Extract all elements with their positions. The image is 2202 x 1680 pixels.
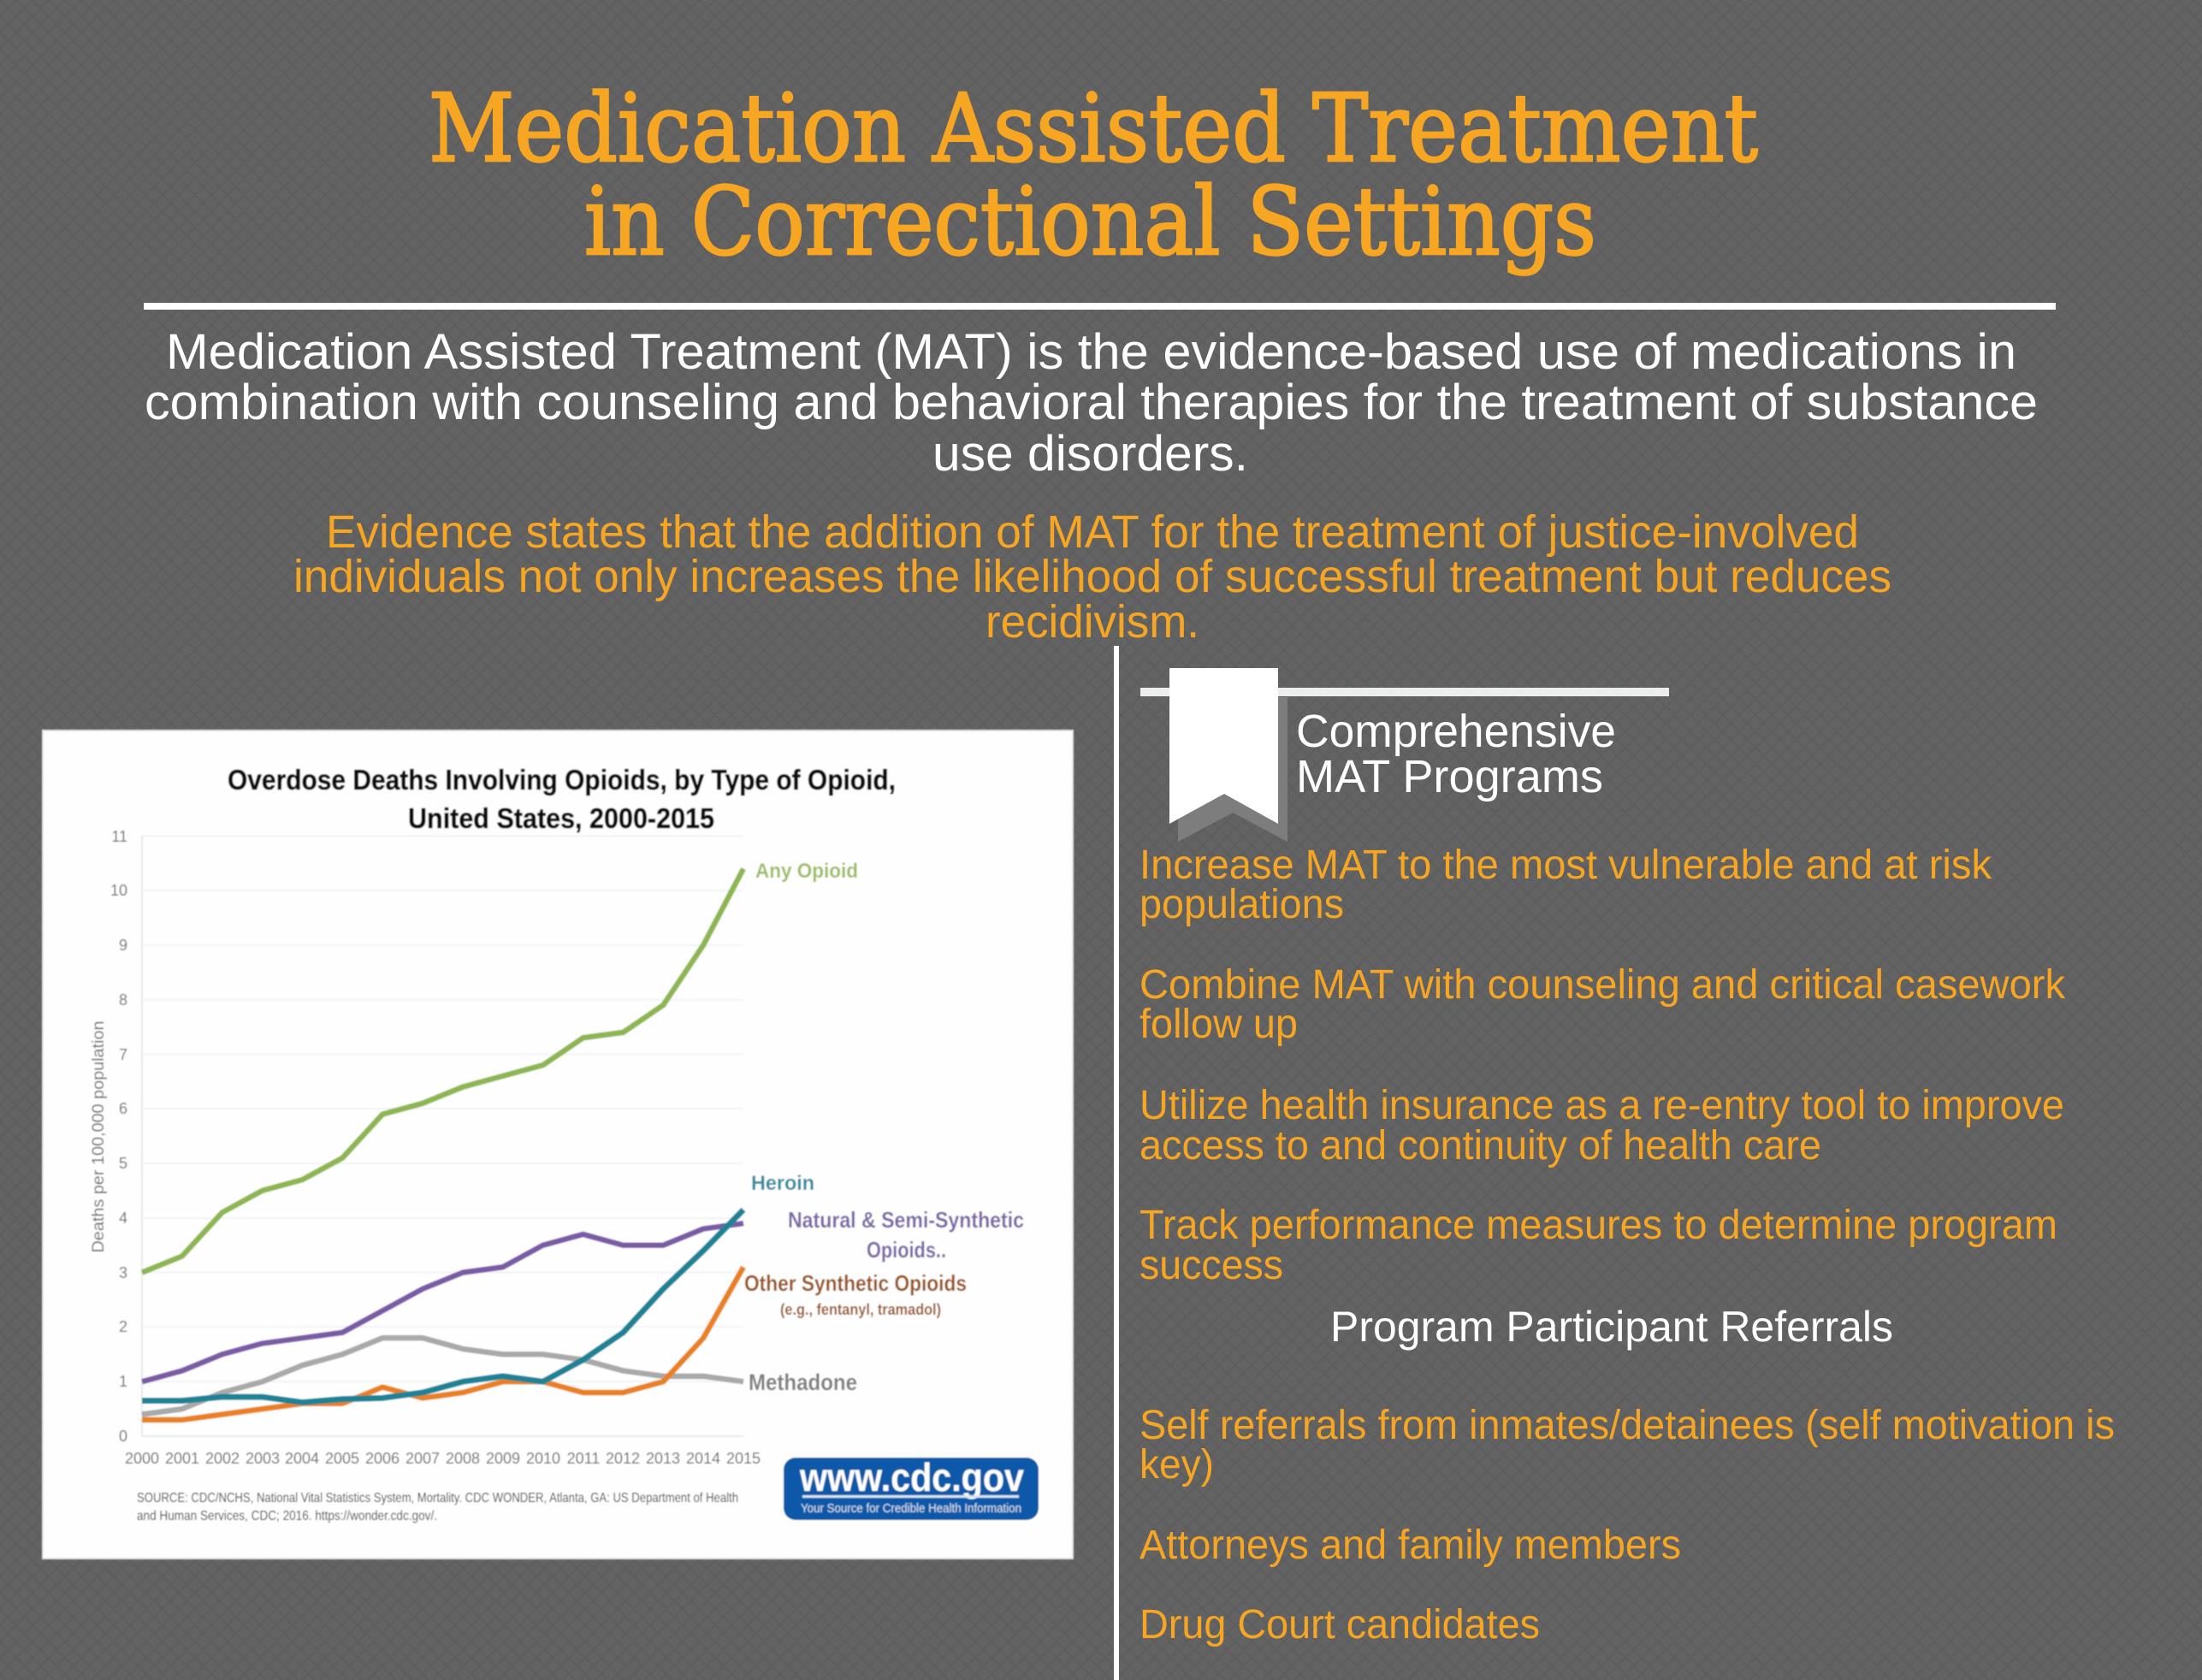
- x axis labels: 2002: [205, 1450, 240, 1467]
- chart title: [228, 764, 896, 834]
- heading: program participant referrals: Program Participant Referrals: [1330, 1303, 1893, 1351]
- x axis labels: 2004: [285, 1450, 319, 1467]
- icon: ribbon with bar: [1140, 668, 1669, 842]
- y axis grid and tick labels: 9: [119, 937, 127, 954]
- evidence text: individuals not only increases the likelihood of successful treatment but reduces: [293, 551, 1891, 602]
- y axis grid and tick labels: 10: [110, 882, 127, 899]
- panel: overdose deaths chart: [43, 731, 1073, 1559]
- cdc logo: [784, 1455, 1039, 1520]
- definition text: combination with counseling and behavioral therapies for the treatment of substance: [145, 375, 2038, 430]
- y axis grid and tick labels: 2: [119, 1318, 127, 1335]
- list: program components: follow up: [1139, 1002, 1298, 1047]
- x axis labels: 2015: [726, 1450, 761, 1467]
- list: program components: populations: [1139, 882, 1344, 927]
- heading: comprehensive MAT programs: MAT Programs: [1296, 751, 1603, 802]
- source note: and Human Services, CDC; 2016. https://wonder.cdc.gov/.: [137, 1509, 437, 1523]
- list: program components: Utilize health insurance as a re-entry tool to improve: [1139, 1083, 2064, 1128]
- column divider: [1114, 646, 1119, 1680]
- series labels: Natural & Semi-Synthetic: [788, 1207, 1024, 1233]
- y axis grid and tick labels: 11: [111, 828, 127, 845]
- title: in Correctional Settings: [584, 167, 1596, 276]
- series: any opioid: [142, 868, 743, 1273]
- y axis title: Deaths per 100,000 population: [90, 1021, 108, 1252]
- series labels: Methadone: [749, 1369, 857, 1395]
- title: [429, 74, 1758, 276]
- series: methadone: [142, 1338, 743, 1414]
- definition text: [145, 324, 2038, 482]
- x axis labels: 2013: [646, 1450, 680, 1467]
- source note: [137, 1491, 738, 1523]
- line series: [142, 868, 743, 1420]
- definition text: Medication Assisted Treatment (MAT) is the evidence-based use of medications in: [166, 324, 2016, 380]
- list: program components: Combine MAT with counseling and critical casework: [1139, 962, 2066, 1008]
- list: referral sources: Self referrals from inmates/detainees (self motivation is: [1139, 1403, 2115, 1448]
- series labels: Any Opioid: [755, 860, 858, 883]
- evidence text: recidivism.: [986, 596, 1199, 648]
- series: natural and semi-synthetic: [142, 1223, 743, 1381]
- x axis labels: 2007: [405, 1450, 440, 1467]
- list: program components: Track performance measures to determine program: [1139, 1203, 2057, 1248]
- series labels: [744, 860, 1024, 1395]
- list: program components: Increase MAT to the most vulnerable and at risk: [1139, 843, 1992, 888]
- y axis grid and tick labels: 1: [119, 1373, 127, 1390]
- x axis labels: 2008: [446, 1450, 480, 1467]
- heading: comprehensive MAT programs: Comprehensive: [1296, 706, 1616, 757]
- y axis grid and tick labels: 3: [119, 1264, 127, 1281]
- series labels: (e.g., fentanyl, tramadol): [780, 1301, 941, 1318]
- y axis grid and tick labels: 8: [119, 991, 127, 1009]
- chart title: Overdose Deaths Involving Opioids, by Type of Opioid,: [228, 764, 896, 796]
- series: heroin: [142, 1210, 743, 1402]
- cdc logo: www.cdc.gov: [799, 1455, 1024, 1500]
- y axis grid and tick labels: [110, 828, 743, 1445]
- evidence text: Evidence states that the addition of MAT for the treatment of justice-involved: [326, 506, 1859, 558]
- y axis grid and tick labels: 6: [119, 1100, 127, 1117]
- x axis labels: 2001: [165, 1450, 199, 1467]
- list: referral sources: Drug Court candidates: [1139, 1602, 1540, 1647]
- evidence text: [293, 506, 1891, 648]
- series labels: Heroin: [751, 1172, 814, 1195]
- title: Medication Assisted Treatment: [429, 74, 1758, 183]
- definition text: use disorders.: [932, 426, 1248, 482]
- series: other synthetic: [142, 1267, 743, 1420]
- x axis labels: 2003: [246, 1450, 280, 1467]
- x axis labels: 2005: [325, 1450, 359, 1467]
- x axis labels: 2010: [526, 1450, 560, 1467]
- x axis labels: 2011: [567, 1450, 600, 1467]
- x axis labels: 2000: [125, 1450, 159, 1467]
- x axis labels: 2006: [365, 1450, 400, 1467]
- y axis grid and tick labels: 5: [119, 1155, 127, 1172]
- x axis labels: 2009: [486, 1450, 520, 1467]
- chart title: United States, 2000-2015: [408, 802, 714, 834]
- y axis grid and tick labels: 7: [119, 1046, 127, 1063]
- x axis labels: [125, 1450, 761, 1467]
- list: referral sources: [1139, 1403, 2115, 1647]
- y axis grid and tick labels: 4: [119, 1210, 127, 1227]
- cdc logo: Your Source for Credible Health Information: [801, 1501, 1021, 1516]
- series labels: Other Synthetic Opioids: [744, 1270, 967, 1296]
- title rule: [144, 303, 2056, 310]
- x axis labels: 2014: [686, 1450, 720, 1467]
- heading: comprehensive MAT programs: [1296, 706, 1616, 802]
- series labels: Opioids..: [867, 1237, 946, 1263]
- list: program components: success: [1139, 1243, 1283, 1288]
- list: program components: [1139, 843, 2066, 1288]
- source note: SOURCE: CDC/NCHS, National Vital Statistics System, Mortality. CDC WONDER, Atlanta, GA: US Department of Health: [137, 1491, 738, 1505]
- list: program components: access to and continuity of health care: [1139, 1123, 1821, 1168]
- y axis grid and tick labels: 0: [119, 1428, 127, 1445]
- list: referral sources: Attorneys and family members: [1139, 1523, 1681, 1568]
- list: referral sources: key): [1139, 1442, 1214, 1488]
- x axis labels: 2012: [606, 1450, 640, 1467]
